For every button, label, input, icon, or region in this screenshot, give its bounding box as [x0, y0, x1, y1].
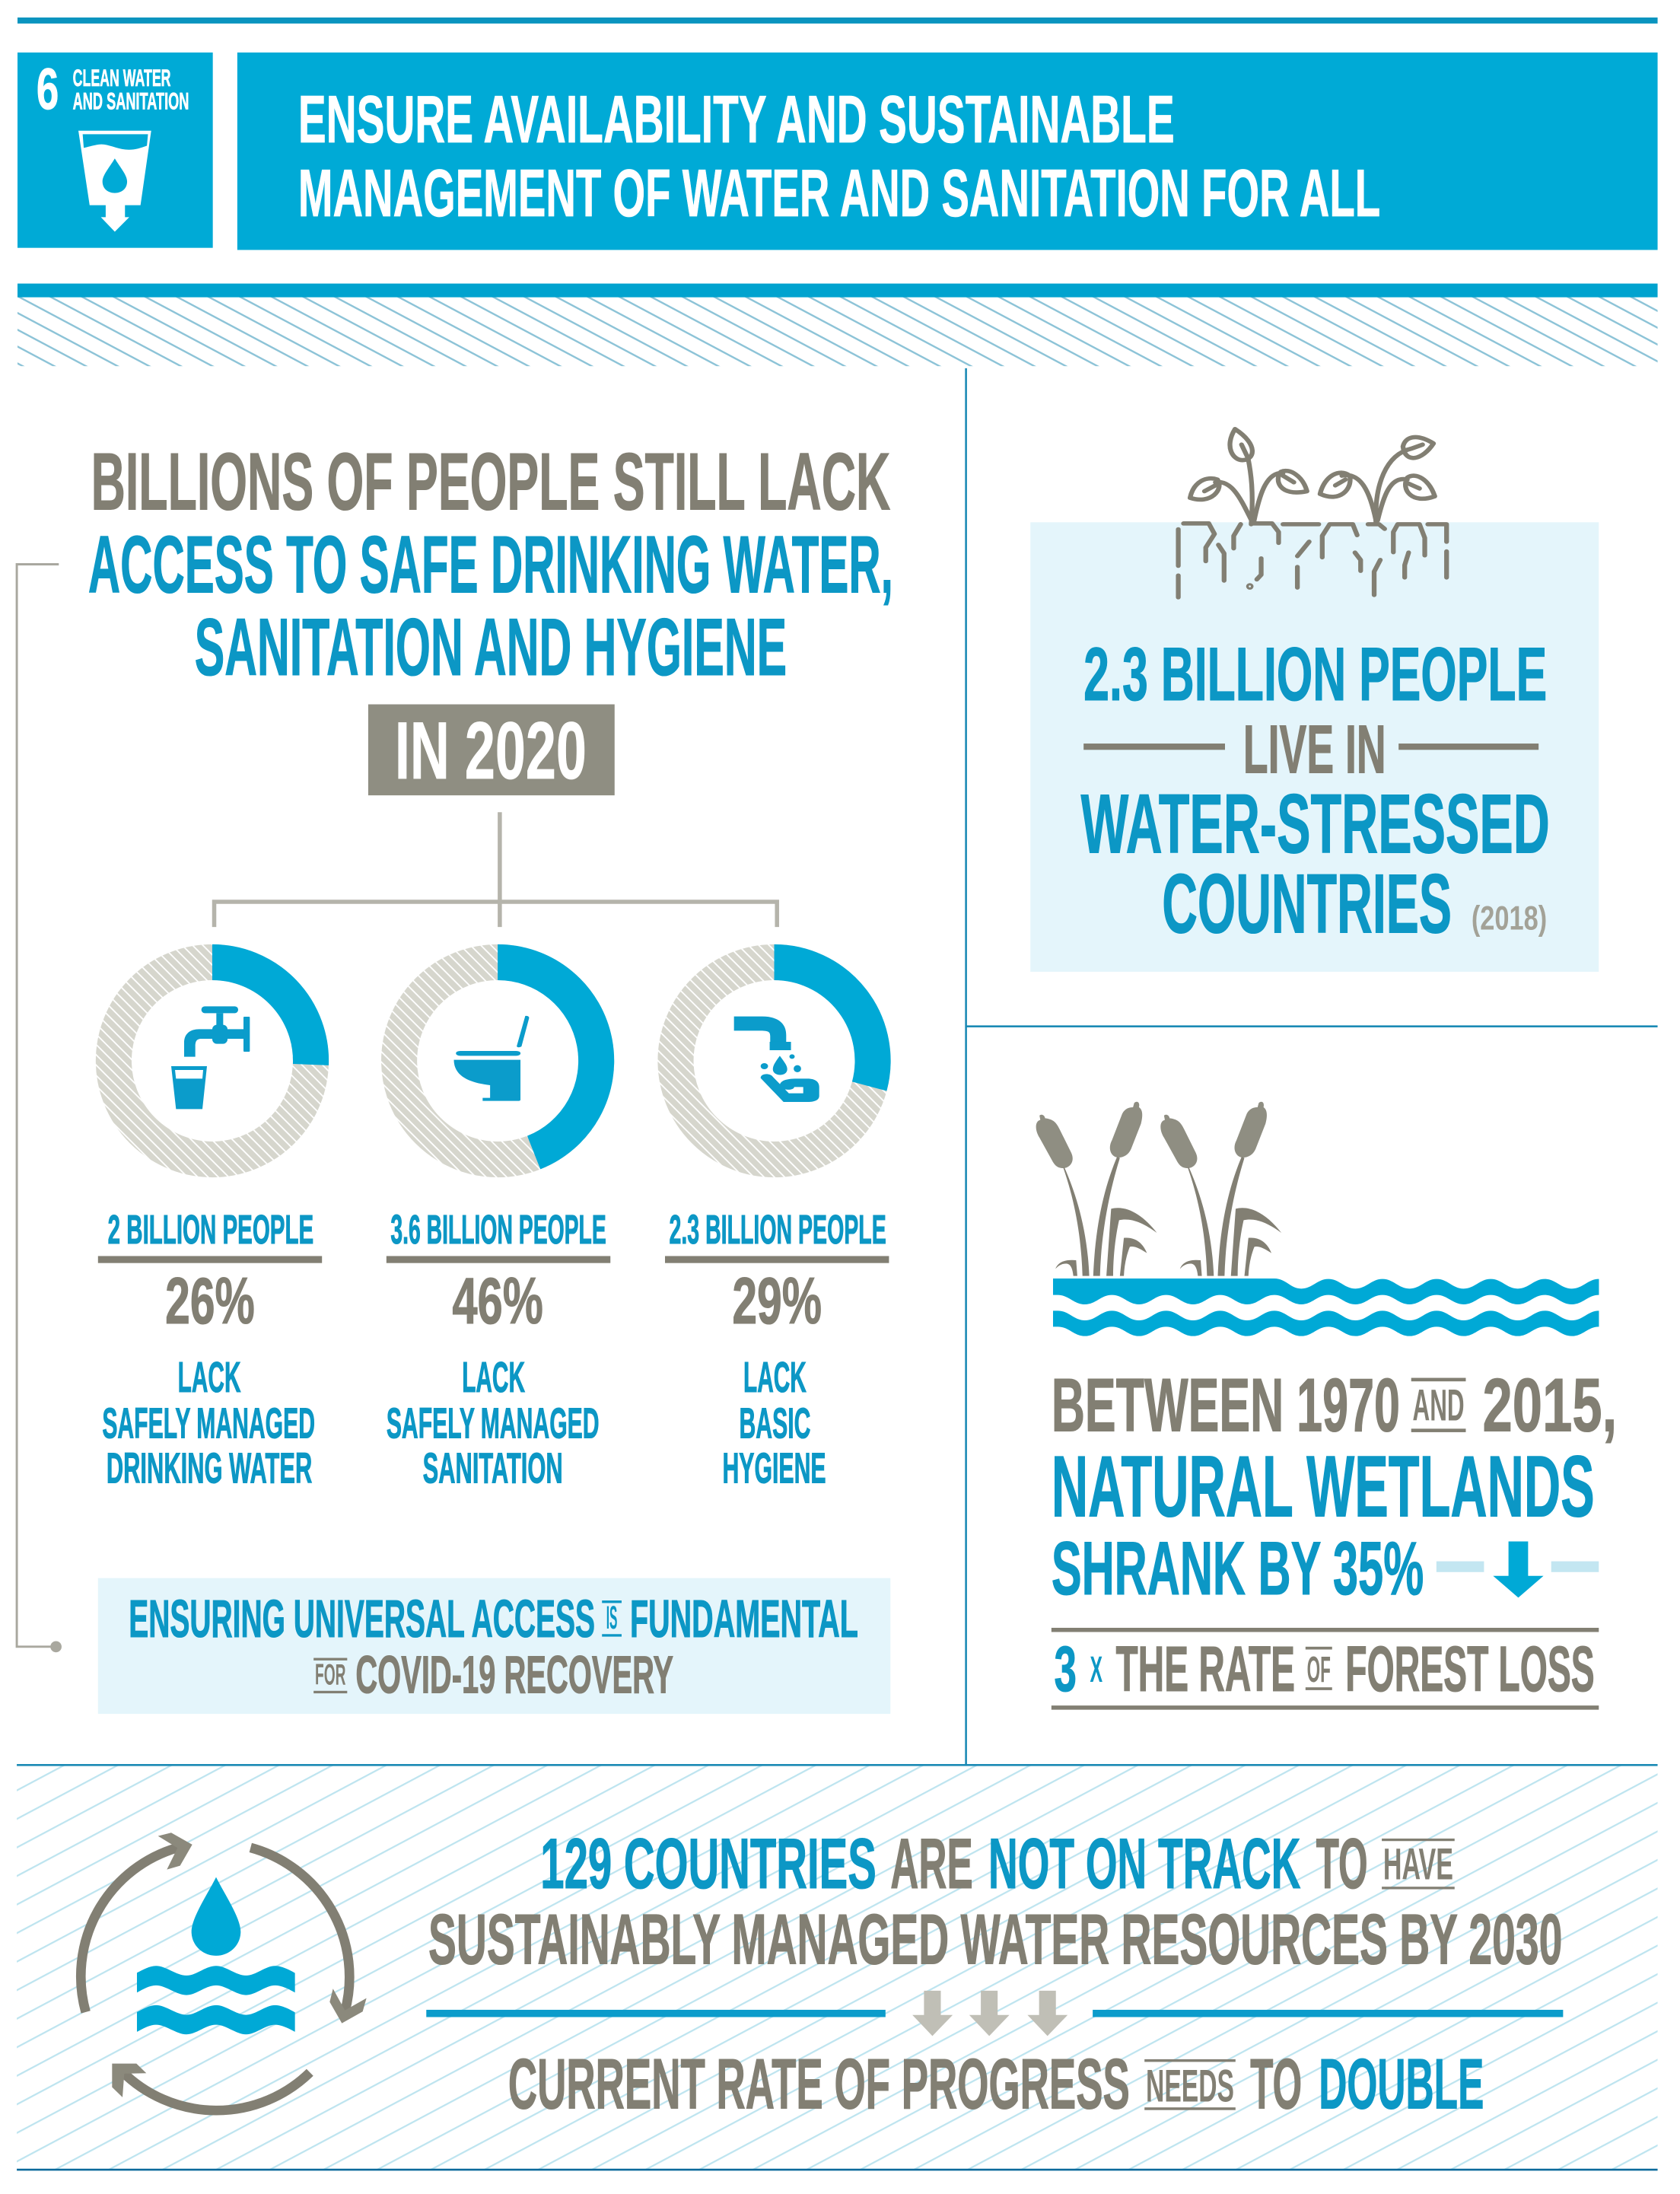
icon: water cycle	[81, 1833, 367, 2110]
side bracket	[17, 565, 62, 1652]
title banner: ENSURE AVAILABILITY AND SUSTAINABLE	[298, 81, 1175, 157]
wetlands text: THE RATE	[1115, 1632, 1295, 1705]
goal name	[73, 65, 189, 115]
text: rate of progress: DOUBLE	[1319, 2044, 1484, 2124]
goal name: CLEAN WATER	[73, 65, 170, 91]
icon: reeds	[1036, 1102, 1281, 1276]
text: not on track: TO	[1316, 1823, 1368, 1903]
wetlands text: 2015,	[1483, 1363, 1617, 1447]
stat column: sanitation: LACK	[462, 1353, 525, 1402]
heading: SANITATION AND HYGIENE	[195, 601, 787, 693]
wetlands text	[1052, 1363, 1617, 1710]
wetlands text: OF	[1307, 1650, 1331, 1690]
donut: drinking water 26%	[113, 962, 311, 1160]
panel: wetlands	[1036, 1102, 1617, 1710]
stat text	[1080, 632, 1550, 951]
stat column: hygiene: 2.3 BILLION PEOPLE	[670, 1208, 886, 1253]
callout: universal access: FOR	[315, 1659, 346, 1692]
goal number: 6	[37, 57, 59, 123]
connector tree	[215, 812, 777, 927]
donut: sanitation 46%	[399, 962, 597, 1160]
icon: toilet	[454, 1016, 529, 1101]
stat column: sanitation: SAFELY MANAGED	[387, 1400, 600, 1448]
stat column: sanitation: SANITATION	[423, 1444, 563, 1493]
stat column: drinking water: LACK	[178, 1353, 240, 1402]
text: rate of progress: CURRENT RATE OF PROGRESS	[508, 2044, 1130, 2124]
icon: three down arrows	[912, 1991, 1068, 2036]
stat column: hygiene: LACK	[743, 1353, 807, 1402]
icon: water glass	[78, 131, 151, 232]
text: rate of progress: NEEDS	[1146, 2060, 1234, 2112]
goal 6 badge	[18, 53, 213, 248]
year badge: IN 2020	[395, 705, 587, 796]
panel: water stress	[1030, 429, 1599, 972]
panel: billions of people	[17, 436, 893, 1714]
text: not on track	[428, 1823, 1562, 1979]
stat column: hygiene: 29%	[732, 1265, 822, 1338]
icon: seedlings in cracked soil	[1179, 429, 1446, 597]
donut: hygiene 29%	[676, 962, 873, 1160]
stat column: drinking water: 26%	[165, 1265, 255, 1338]
text: not on track: 129 COUNTRIES	[540, 1823, 877, 1903]
callout: universal access: ENSURING UNIVERSAL ACCESS	[129, 1589, 595, 1648]
wetlands text: 3	[1055, 1632, 1077, 1705]
icon: hand washing	[734, 1017, 819, 1102]
heading	[88, 436, 893, 693]
stat column: hygiene: HYGIENE	[722, 1444, 826, 1493]
heading: ACCESS TO SAFE DRINKING WATER,	[88, 518, 893, 610]
panel: water resources	[17, 1765, 1658, 2170]
wetlands text: BETWEEN 1970	[1052, 1363, 1400, 1447]
icon: down arrow	[1437, 1541, 1599, 1597]
callout: universal access: COVID-19 RECOVERY	[355, 1645, 673, 1705]
stat column: sanitation: 3.6 BILLION PEOPLE	[390, 1208, 606, 1253]
icon: tap and glass	[171, 1006, 250, 1109]
callout: universal access: FUNDAMENTAL	[630, 1589, 858, 1648]
icon: water waves	[1053, 1279, 1599, 1336]
stat column: sanitation	[387, 1208, 610, 1493]
stat column: drinking water: 2 BILLION PEOPLE	[108, 1208, 313, 1253]
text: not on track: ARE	[890, 1823, 973, 1903]
callout: universal access: IS	[606, 1600, 617, 1635]
goal name: AND SANITATION	[73, 88, 189, 115]
wetlands text: SHRANK BY 35%	[1052, 1527, 1424, 1611]
stat column: drinking water: SAFELY MANAGED	[102, 1400, 315, 1448]
heading: BILLIONS OF PEOPLE STILL LACK	[91, 436, 890, 527]
header band with hatching	[18, 284, 1658, 366]
wetlands text: AND	[1413, 1381, 1465, 1431]
text: rate of progress: TO	[1250, 2044, 1302, 2124]
stat text: COUNTRIES	[1162, 857, 1452, 951]
stat column: drinking water	[98, 1208, 322, 1493]
stat text: (2018)	[1472, 900, 1547, 938]
wetlands text: X	[1090, 1650, 1102, 1690]
text: not on track: NOT ON TRACK	[988, 1823, 1300, 1903]
top rule	[18, 18, 1658, 24]
callout: universal access	[98, 1578, 890, 1714]
stat text: LIVE IN	[1243, 712, 1386, 788]
stat column: hygiene: BASIC	[740, 1400, 810, 1448]
stat column: hygiene	[665, 1208, 889, 1493]
text: not on track: HAVE	[1383, 1839, 1453, 1889]
divider with arrows	[426, 1991, 1563, 2036]
stat column: sanitation: 46%	[452, 1265, 543, 1338]
stat column: drinking water: DRINKING WATER	[107, 1444, 312, 1493]
title banner	[237, 53, 1658, 250]
